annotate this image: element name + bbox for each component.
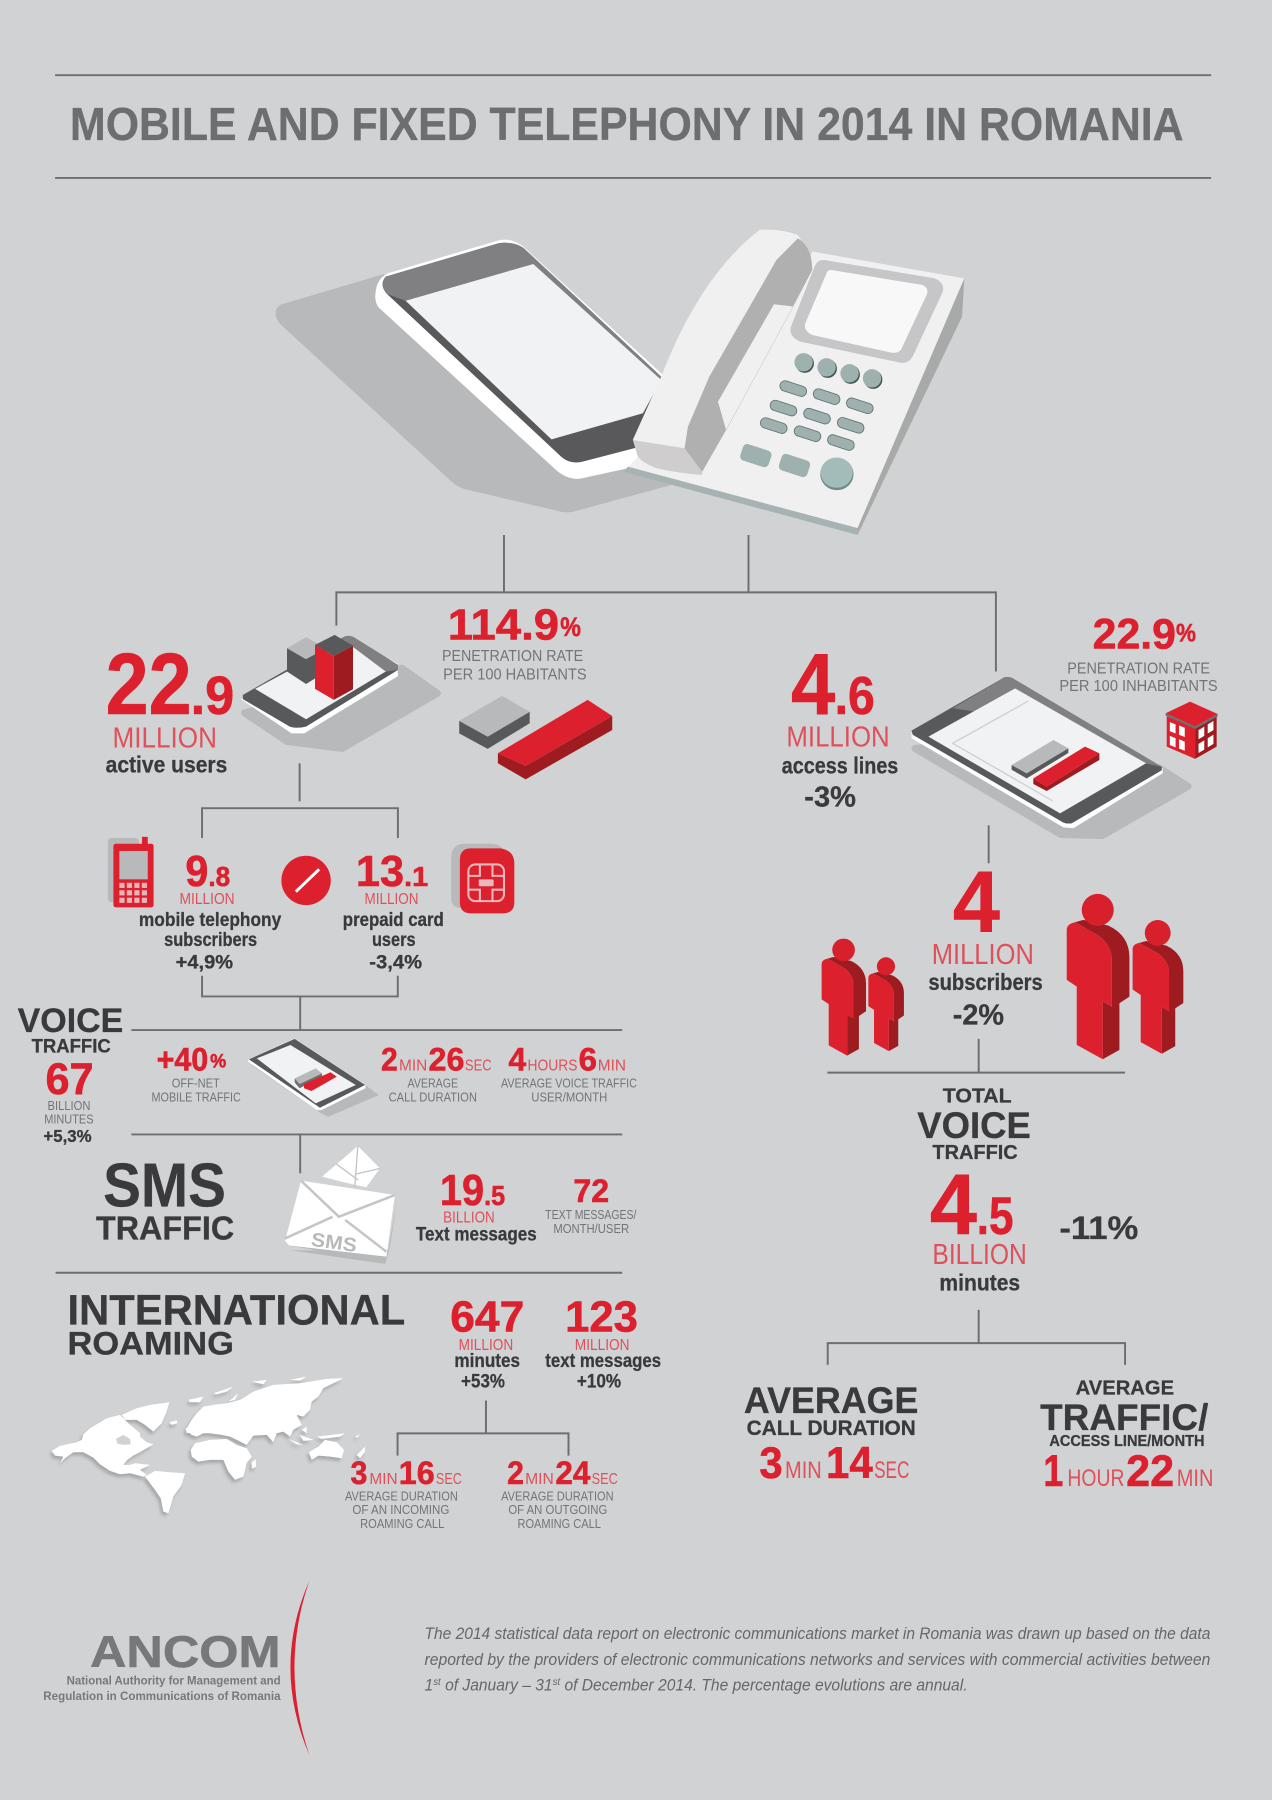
stat: 4 hours 6 min average voice traffic: HOURS: [528, 1057, 577, 1075]
stat: 22.9 million active users: 22: [106, 636, 192, 733]
stat: 647 million minutes: [450, 1294, 524, 1392]
stat: 2 min 26 sec average call duration: SEC: [465, 1057, 492, 1075]
connector: fixed subscribers stem: [827, 825, 1125, 1073]
stat: 2 min 24 sec outgoing roaming call: [501, 1455, 618, 1531]
stat: 22.9% penetration rate per 100 inhabitants: %: [1176, 620, 1196, 648]
stat: 2 min 24 sec outgoing roaming call: MIN: [525, 1470, 554, 1488]
heading: total voice traffic: TRAFFIC: [932, 1141, 1018, 1164]
stat: 4 million subscribers: MILLION: [932, 939, 1034, 971]
stat: 2 min 26 sec average call duration: 2: [381, 1042, 398, 1078]
stat: 2 min 24 sec outgoing roaming call: ROAMING CALL: [518, 1516, 601, 1531]
stat: 4 hours 6 min average voice traffic: 6: [579, 1042, 597, 1078]
heading: voice traffic: BILLION: [48, 1098, 90, 1113]
stat: 13.1 million prepaid card users: users: [372, 930, 416, 951]
stat: 4.6 million access lines: .6: [835, 666, 875, 726]
stat: 13.1 million prepaid card users: prepaid card: [343, 910, 444, 931]
stat: 4.6 million access lines: MILLION: [786, 722, 890, 754]
footer note: of January – 31: [441, 1676, 553, 1695]
stat: 4.5 billion minutes: [930, 1157, 1027, 1296]
stat: average traffic per access line per month 1 hour 22 min: TRAFFIC/: [1040, 1397, 1208, 1438]
stat: 4.5 billion minutes: BILLION: [932, 1239, 1027, 1271]
heading: total voice traffic: VOICE: [917, 1105, 1031, 1146]
stat: 72 text messages per month per user: TEXT MESSAGES/: [545, 1207, 637, 1222]
smartphone shadow: [279, 278, 677, 509]
stat: 114.9% penetration rate: %: [560, 612, 581, 642]
connector: bracket to voice traffic: [56, 976, 622, 1273]
stat: 4.6 million access lines: -3%: [804, 782, 856, 814]
heading: voice traffic: TRAFFIC: [32, 1036, 111, 1058]
stat: 22.9% penetration rate per 100 inhabitants: PENETRATION RATE: [1067, 659, 1210, 677]
stat: -11% change: -11%: [1059, 1210, 1138, 1246]
chart: isometric penetration bars: [459, 696, 612, 779]
stat: 3 min 16 sec incoming roaming call: MIN: [369, 1470, 398, 1488]
stat: 19.5 billion text messages: BILLION: [443, 1209, 495, 1227]
stat: 22.9 million active users: MILLION: [113, 722, 217, 754]
stat: 4.6 million access lines: [782, 636, 898, 814]
stat: 9.8 million mobile telephony subscribers: [139, 848, 282, 973]
stat: average call duration 3 min 14 sec: SEC: [874, 1457, 909, 1484]
stat: 4 hours 6 min average voice traffic: USER/MONTH: [531, 1090, 607, 1105]
stat: 647 million minutes: +53%: [461, 1371, 505, 1392]
stat: 4 hours 6 min average voice traffic: [501, 1042, 637, 1105]
stat: 13.1 million prepaid card users: .1: [404, 861, 428, 892]
stat: 123 million text messages: 123: [565, 1294, 638, 1342]
heading: international roaming: [68, 1286, 405, 1362]
stat: 2 min 24 sec outgoing roaming call: 24: [555, 1455, 591, 1491]
logo: ANCOM: [43, 1581, 309, 1755]
icon: tablet with bars: [912, 677, 1188, 836]
footer note: The 2014 statistical data report on electronic communications market in Romania was drawn up based on the data: [425, 1624, 1210, 1643]
stat: average call duration 3 min 14 sec: [744, 1380, 918, 1488]
stat: 123 million text messages: MILLION: [575, 1336, 630, 1354]
stat: 3 min 16 sec incoming roaming call: 16: [399, 1455, 435, 1491]
stat: 647 million minutes: minutes: [454, 1351, 520, 1372]
stat: 19.5 billion text messages: [416, 1167, 537, 1245]
stat: 3 min 16 sec incoming roaming call: OF AN INCOMING: [352, 1502, 449, 1517]
stat: 22.9% penetration rate per 100 inhabitants: 22.9: [1093, 610, 1176, 657]
stat: 9.8 million mobile telephony subscribers: 9: [185, 848, 208, 896]
stat: 22.9% penetration rate per 100 inhabitants: PER 100 INHABITANTS: [1059, 677, 1218, 695]
stat: 2 min 24 sec outgoing roaming call: OF AN OUTGOING: [508, 1502, 607, 1517]
stat: 3 min 16 sec incoming roaming call: 3: [350, 1455, 367, 1491]
stat: 4.5 billion minutes: minutes: [939, 1270, 1020, 1296]
icon: building: [1166, 702, 1218, 759]
stat: 114.9% penetration rate: [442, 601, 587, 684]
stat: 2 min 26 sec average call duration: MIN: [399, 1057, 427, 1075]
icon: small tablet with bars: [248, 1038, 379, 1117]
heading: voice traffic: [18, 1002, 123, 1146]
stat: average traffic per access line per month 1 hour 22 min: AVERAGE: [1076, 1376, 1174, 1399]
stat: 4 million subscribers: [928, 854, 1043, 1031]
stat: 647 million minutes: MILLION: [459, 1336, 513, 1354]
heading: SMS traffic: TRAFFIC: [96, 1210, 234, 1247]
desk phone handset: [633, 230, 812, 475]
stat: 2 min 24 sec outgoing roaming call: 2: [507, 1455, 524, 1491]
stat: 9.8 million mobile telephony subscribers: subscribers: [164, 930, 257, 951]
heading: international roaming: ROAMING: [68, 1326, 234, 1362]
stat: 9.8 million mobile telephony subscribers: mobile telephony: [139, 910, 282, 931]
stat: 123 million text messages: [545, 1294, 661, 1392]
stat: 2 min 26 sec average call duration: [381, 1042, 492, 1105]
logo: ANCOM: ANCOM: [90, 1627, 281, 1677]
connector: mobile subscribers bracket: [202, 763, 398, 838]
stat: 114.9% penetration rate: PER 100 HABITANTS: [443, 666, 587, 684]
stat: average traffic per access line per month 1 hour 22 min: 1: [1043, 1446, 1063, 1496]
heading: voice traffic: 67: [45, 1054, 94, 1104]
stat: 13.1 million prepaid card users: [343, 848, 444, 973]
stat: +40% off-net mobile traffic: +40: [157, 1042, 208, 1078]
stat: +40% off-net mobile traffic: [152, 1042, 241, 1105]
stat: 13.1 million prepaid card users: MILLION: [364, 890, 418, 908]
heading: total voice traffic: [917, 1085, 1031, 1164]
stat: 22.9 million active users: active users: [106, 752, 227, 778]
footer note: st: [433, 1677, 442, 1688]
stat: 13.1 million prepaid card users: 13: [356, 848, 404, 896]
stat: average traffic per access line per month 1 hour 22 min: [1040, 1376, 1213, 1496]
icon: SMS envelopes: SMS: [310, 1229, 358, 1257]
smartphone: [375, 240, 680, 479]
heading: voice traffic: MINUTES: [44, 1111, 94, 1126]
stat: 2 min 26 sec average call duration: 26: [429, 1042, 464, 1078]
stat: average traffic per access line per month 1 hour 22 min: 22: [1126, 1446, 1174, 1496]
stat: 4.5 billion minutes: .5: [977, 1187, 1013, 1246]
stat: 4.6 million access lines: 4: [791, 636, 836, 733]
stat: 2 min 26 sec average call duration: CALL DURATION: [389, 1090, 477, 1105]
stat: 9.8 million mobile telephony subscribers: .8: [208, 861, 230, 892]
heading: voice traffic: +5,3%: [43, 1126, 92, 1146]
stat: 19.5 billion text messages: Text messages: [416, 1223, 537, 1245]
stat: 2 min 26 sec average call duration: AVERAGE: [408, 1076, 458, 1091]
map: world: [50, 1377, 365, 1516]
stat: 9.8 million mobile telephony subscribers: +4,9%: [176, 951, 233, 973]
stat: average call duration 3 min 14 sec: MIN: [785, 1457, 822, 1484]
stat: 4 hours 6 min average voice traffic: AVERAGE VOICE TRAFFIC: [501, 1076, 637, 1091]
stat: 4 million subscribers: subscribers: [928, 969, 1043, 995]
stat: 4 million subscribers: -2%: [953, 999, 1004, 1031]
stat: 19.5 billion text messages: 19: [440, 1167, 484, 1215]
stat: 4 hours 6 min average voice traffic: 4: [509, 1042, 526, 1078]
stat: 647 million minutes: 647: [450, 1294, 524, 1342]
stat: 2 min 24 sec outgoing roaming call: SEC: [592, 1470, 618, 1488]
stat: average traffic per access line per month 1 hour 22 min: ACCESS LINE/MONTH: [1049, 1432, 1204, 1450]
stat: average call duration 3 min 14 sec: CALL DURATION: [747, 1417, 916, 1440]
desk phone buttons: [739, 353, 882, 490]
heading: SMS traffic: [96, 1152, 234, 1247]
stat: average traffic per access line per month 1 hour 22 min: MIN: [1177, 1465, 1213, 1492]
stat: 123 million text messages: +10%: [577, 1371, 621, 1392]
footer note: reported by the providers of electronic communications networks and services with commercial activities between: [425, 1650, 1210, 1669]
icon: mobile phone: [108, 837, 154, 907]
stat: 4 hours 6 min average voice traffic: MIN: [598, 1057, 626, 1075]
connector tree from phones: [336, 535, 996, 672]
footer note: of December 2014. The percentage evolutions are annual.: [560, 1676, 968, 1695]
stat: average call duration 3 min 14 sec: 14: [826, 1438, 873, 1488]
stat: 3 min 16 sec incoming roaming call: SEC: [436, 1470, 462, 1488]
stat: average call duration 3 min 14 sec: 3: [759, 1438, 783, 1488]
heading: total voice traffic: TOTAL: [943, 1085, 1012, 1108]
stat: 3 min 16 sec incoming roaming call: ROAMING CALL: [360, 1516, 444, 1531]
icon: SMS envelopes: [285, 1146, 397, 1264]
connector: averages bracket: [828, 1310, 1125, 1365]
icon: SIM card: [451, 844, 514, 913]
heading: voice traffic: VOICE: [18, 1002, 123, 1040]
icon: small people: [822, 939, 904, 1056]
stat: average traffic per access line per month 1 hour 22 min: HOUR: [1067, 1465, 1124, 1492]
stat: 19.5 billion text messages: .5: [484, 1180, 505, 1211]
stat: 13.1 million prepaid card users: -3,4%: [369, 951, 422, 973]
logo: ANCOM: National Authority for Management and: [67, 1673, 281, 1687]
stat: +40% off-net mobile traffic: MOBILE TRAFFIC: [152, 1090, 241, 1105]
heading: international roaming: INTERNATIONAL: [68, 1286, 405, 1333]
stat: 22.9 million active users: .9: [191, 666, 234, 726]
stat: 3 min 16 sec incoming roaming call: [345, 1455, 462, 1531]
icon: large people: [1067, 894, 1183, 1059]
icon: isometric phone with bars: [243, 635, 437, 748]
stat: 4.5 billion minutes: 4: [930, 1157, 977, 1253]
stat: 72 text messages per month per user: 72: [573, 1173, 609, 1209]
stat: 114.9% penetration rate: PENETRATION RATE: [442, 647, 583, 665]
stat: 114.9% penetration rate: 114.9: [448, 601, 559, 649]
icon: slash divider circle: [281, 856, 331, 905]
footer note: [425, 1624, 1210, 1695]
stat: 22.9% penetration rate per 100 inhabitants: [1059, 610, 1218, 695]
footer note: 1: [425, 1676, 434, 1695]
logo: ANCOM: Regulation in Communications of Romania: [43, 1689, 281, 1703]
stat: average call duration 3 min 14 sec: AVERAGE: [744, 1380, 918, 1421]
footer note: st: [553, 1677, 561, 1688]
heading: SMS traffic: SMS: [103, 1152, 226, 1221]
stat: 72 text messages per month per user: [545, 1173, 637, 1236]
stat: 22.9 million active users: [106, 636, 234, 778]
stat: 123 million text messages: text messages: [545, 1351, 661, 1372]
stat: +40% off-net mobile traffic: %: [210, 1051, 226, 1073]
stat: 9.8 million mobile telephony subscribers: MILLION: [180, 890, 235, 908]
stat: 4 million subscribers: 4: [953, 854, 1000, 951]
title: MOBILE AND FIXED TELEPHONY IN 2014 IN ROMANIA: [70, 98, 1184, 150]
stat: 2 min 24 sec outgoing roaming call: AVERAGE DURATION: [501, 1489, 614, 1504]
desk phone base: [623, 251, 964, 535]
stat: 4.6 million access lines: access lines: [782, 752, 898, 778]
connector: roaming bracket: [398, 1401, 568, 1456]
stat: +40% off-net mobile traffic: OFF-NET: [172, 1076, 220, 1091]
illustration: smartphone and desk phone: [279, 230, 964, 535]
stat: 72 text messages per month per user: MONTH/USER: [553, 1221, 629, 1236]
stat: 3 min 16 sec incoming roaming call: AVERAGE DURATION: [345, 1489, 458, 1504]
